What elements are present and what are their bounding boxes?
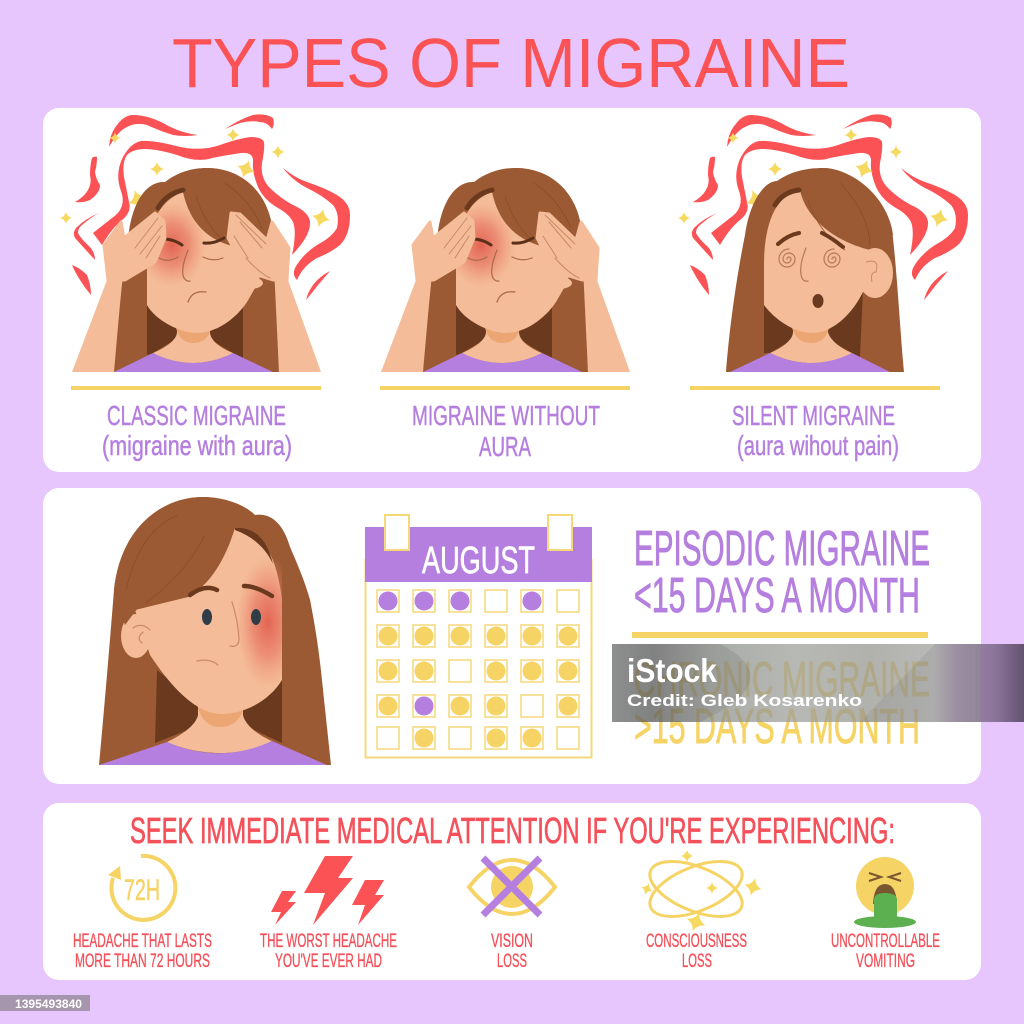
calendar cells bbox=[377, 590, 579, 749]
label: consciousness loss: CONSCIOUSNESS bbox=[646, 931, 747, 952]
label: vomiting: UNCONTROLLABLE bbox=[831, 931, 940, 952]
label: migraine without aura bbox=[412, 400, 600, 462]
calendar purple dots bbox=[378, 592, 542, 716]
icon: crossed eye bbox=[469, 858, 555, 915]
calendar tabs bbox=[385, 515, 572, 550]
text: chronic migraine bbox=[634, 653, 930, 754]
icon: orbits and stars bbox=[639, 850, 764, 935]
label: 72 hours: MORE THAN 72 HOURS bbox=[75, 951, 210, 972]
label: vision loss: VISION bbox=[491, 931, 533, 952]
label: worst headache: THE WORST HEADACHE bbox=[260, 931, 397, 952]
label: 72 hours bbox=[73, 931, 212, 972]
label: classic migraine: (migraine with aura) bbox=[102, 430, 292, 461]
divider: without aura bbox=[380, 386, 630, 390]
label: vomiting: VOMITING bbox=[856, 951, 915, 972]
label: consciousness loss: LOSS bbox=[682, 951, 712, 972]
image id tag bbox=[0, 995, 90, 1011]
title: TYPES OF MIGRAINE bbox=[172, 24, 850, 102]
divider: silent bbox=[690, 386, 940, 390]
divider: episodic/chronic bbox=[632, 632, 928, 638]
text: episodic migraine bbox=[634, 522, 930, 623]
label: worst headache: YOU'VE EVER HAD bbox=[275, 951, 382, 972]
watermark credit: Credit: Gleb Kosarenko bbox=[627, 691, 862, 710]
panel: frequency bbox=[43, 488, 981, 784]
icon: vomiting emoji bbox=[854, 857, 916, 928]
figure: silent migraine bbox=[678, 114, 968, 372]
calendar yellow dots bbox=[378, 626, 578, 748]
icon: 72 hours: 72H bbox=[124, 874, 160, 907]
image id tag: 1395493840 bbox=[15, 997, 82, 1011]
watermark brand: iStock bbox=[627, 652, 718, 689]
figure: woman portrait bbox=[99, 497, 331, 765]
label: worst headache bbox=[260, 931, 397, 972]
label: migraine without aura: AURA bbox=[479, 431, 531, 462]
label: consciousness loss bbox=[646, 931, 747, 972]
calendar bbox=[365, 515, 592, 758]
calendar month: AUGUST bbox=[422, 540, 535, 582]
figure: migraine without aura bbox=[381, 168, 630, 372]
panel: migraine types bbox=[43, 108, 981, 472]
divider: classic bbox=[71, 386, 321, 390]
label: vomiting bbox=[831, 931, 940, 972]
label: vision loss: LOSS bbox=[497, 951, 527, 972]
label: silent migraine bbox=[732, 400, 899, 461]
figure: classic migraine bbox=[60, 114, 350, 372]
label: migraine without aura: MIGRAINE WITHOUT bbox=[412, 400, 600, 431]
watermark band bbox=[612, 644, 1024, 722]
label: classic migraine: CLASSIC MIGRAINE bbox=[107, 400, 286, 431]
panel: warning signs bbox=[43, 803, 981, 980]
label: silent migraine: SILENT MIGRAINE bbox=[732, 400, 895, 431]
icon: 72 hours bbox=[108, 856, 175, 920]
label: silent migraine: (aura wihout pain) bbox=[737, 430, 899, 461]
label: classic migraine bbox=[102, 400, 292, 461]
label: 72 hours: HEADACHE THAT LASTS bbox=[73, 931, 212, 952]
icon: lightning bolts bbox=[271, 856, 384, 925]
label: vision loss bbox=[491, 931, 533, 972]
